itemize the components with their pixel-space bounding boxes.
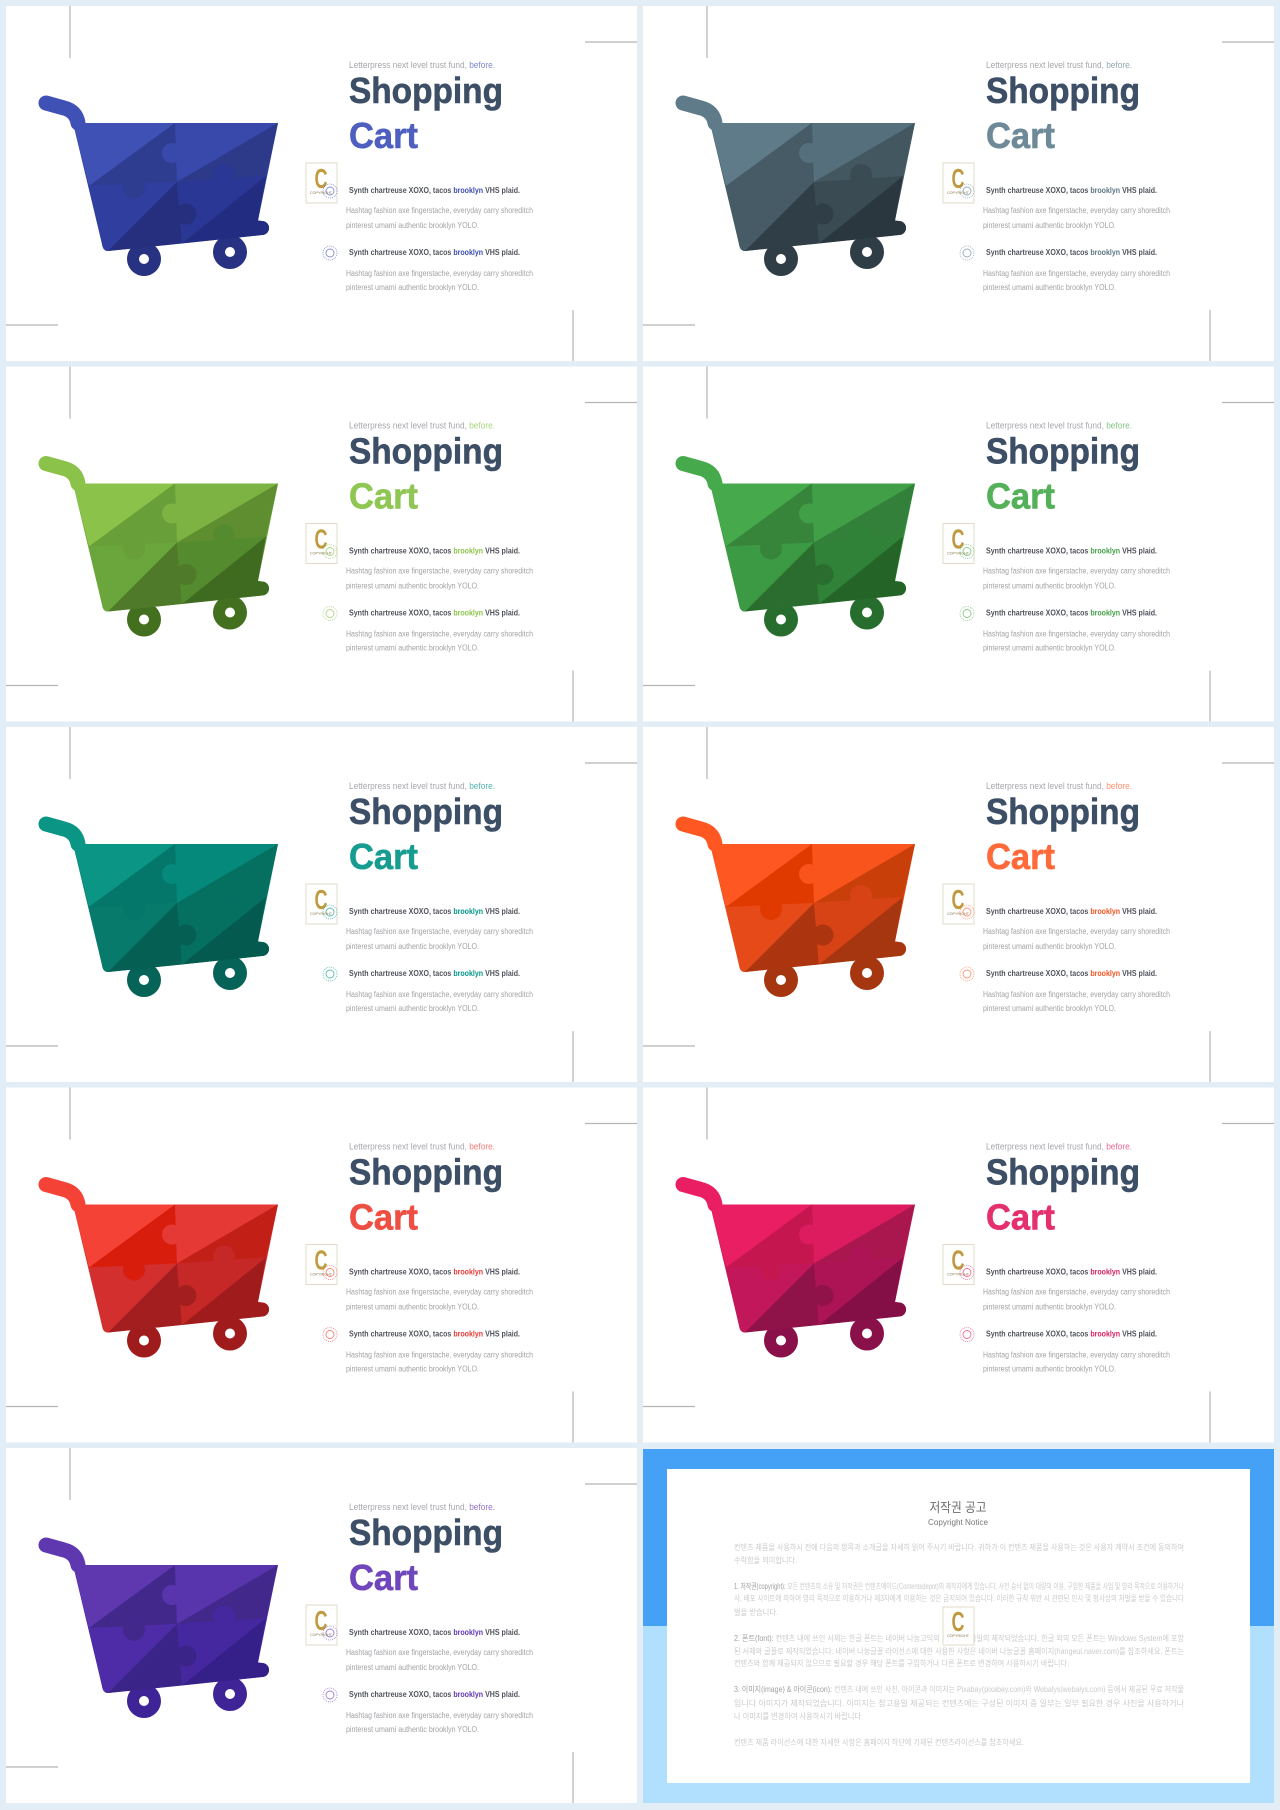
- heading: Shopping: Shopping: [349, 430, 503, 472]
- tagline: Letterpress next level trust fund, before.: [349, 1502, 495, 1513]
- logo stamp: COPYRIGHT: [947, 1633, 970, 1638]
- point 2 text: Hashtag fashion axe fingerstache, everyday carry shoreditch: [346, 1350, 533, 1360]
- point 2 heading: Synth chartreuse XOXO, tacos brooklyn VHS plaid.: [349, 1328, 520, 1338]
- icon: target 1: [323, 1626, 337, 1640]
- section 1: copyright: [734, 1581, 1185, 1617]
- icon: target 2: [960, 967, 974, 981]
- heading: Cart: Cart: [986, 476, 1055, 516]
- logo stamp: C: [952, 1606, 964, 1637]
- logo stamp: C: [314, 884, 328, 915]
- tagline: Letterpress next level trust fund, before.: [986, 781, 1132, 792]
- point 2 text: Hashtag fashion axe fingerstache, everyday carry shoreditch: [983, 269, 1170, 278]
- logo stamp: COPYRIGHT: [947, 190, 970, 195]
- logo stamp: COPYRIGHT: [310, 1632, 333, 1637]
- logo stamp: COPYRIGHT: [947, 1272, 970, 1276]
- logo stamp: COPYRIGHT: [310, 550, 333, 556]
- point 2 heading: Synth chartreuse XOXO, tacos brooklyn VHS plaid.: [349, 247, 520, 257]
- logo stamp: [306, 163, 337, 203]
- point 2 text: [346, 1711, 533, 1734]
- point 2 heading: Synth chartreuse XOXO, tacos brooklyn VHS plaid.: [986, 968, 1157, 978]
- logo stamp: COPYRIGHT: [947, 911, 970, 916]
- panel: light green shopping cart: [6, 366, 637, 722]
- logo stamp: C: [314, 1244, 328, 1276]
- point 1 text: [983, 927, 1170, 951]
- icon: puzzle shopping cart: [683, 824, 915, 997]
- tagline: Letterpress next level trust fund, before.: [349, 60, 495, 71]
- logo stamp: C: [314, 1605, 328, 1636]
- point 1 text: Hashtag fashion axe fingerstache, everyday carry shoreditch: [983, 1288, 1170, 1296]
- point 1 text: Hashtag fashion axe fingerstache, everyday carry shoreditch: [346, 566, 533, 576]
- heading: Shopping: Shopping: [986, 430, 1140, 472]
- logo stamp: C: [952, 1244, 964, 1276]
- section 3: image and icon: 나 이미지를 변경하여 사용하시기 바랍니다.: [734, 1711, 863, 1721]
- heading: Shopping: Shopping: [986, 1152, 1140, 1192]
- point 2 text: Hashtag fashion axe fingerstache, everyday carry shoreditch: [346, 1711, 533, 1720]
- point 1 text: pinterest umami authentic brooklyn YOLO.: [346, 582, 479, 590]
- icon: target 1: [960, 905, 974, 919]
- icon: puzzle shopping cart: [683, 103, 915, 276]
- point 1 text: pinterest umami authentic brooklyn YOLO.: [983, 582, 1116, 590]
- logo stamp: COPYRIGHT: [310, 911, 333, 916]
- panel: copyright notice: [643, 1449, 1274, 1803]
- point 1 text: Hashtag fashion axe fingerstache, everyday carry shoreditch: [983, 566, 1170, 576]
- heading: Cart: Cart: [986, 115, 1055, 156]
- point 2 text: [983, 630, 1170, 652]
- point 1 text: Hashtag fashion axe fingerstache, everyday carry shoreditch: [346, 1648, 533, 1657]
- point 2 text: [346, 269, 533, 292]
- point 2 text: pinterest umami authentic brooklyn YOLO.: [346, 1725, 479, 1734]
- point 1 text: [346, 927, 533, 951]
- point 1 heading: Synth chartreuse XOXO, tacos brooklyn VHS plaid.: [349, 906, 520, 916]
- icon: puzzle shopping cart: [46, 103, 278, 276]
- point 2 text: Hashtag fashion axe fingerstache, everyday carry shoreditch: [346, 990, 533, 999]
- heading: Shopping: Shopping: [986, 791, 1140, 832]
- logo stamp: [943, 1244, 974, 1284]
- point 2 text: pinterest umami authentic brooklyn YOLO.: [983, 644, 1116, 652]
- panel: green shopping cart: [643, 366, 1274, 722]
- point 2 text: pinterest umami authentic brooklyn YOLO.: [346, 1004, 479, 1013]
- icon: target 2: [323, 1328, 337, 1342]
- logo stamp: C: [952, 163, 964, 194]
- point 1 text: [983, 206, 1170, 230]
- point 1 text: Hashtag fashion axe fingerstache, everyday carry shoreditch: [983, 927, 1170, 936]
- logo stamp: [306, 524, 337, 564]
- point 2 text: pinterest umami authentic brooklyn YOLO.: [983, 283, 1116, 292]
- point 2 text: [983, 990, 1170, 1013]
- panel: indigo shopping cart: [6, 6, 637, 361]
- logo stamp: [306, 1244, 337, 1284]
- point 1 text: [983, 1288, 1170, 1312]
- point 1 text: [346, 1648, 533, 1672]
- logo stamp: [943, 884, 974, 924]
- section 2: font: 된 서체와 글꼴로 제작되었습니다. 네이버 나눔글꼴 라이선스에 대한 사용한 사항은 네이버 나눔글꼴 홈페이지(hangeul.naver.com)를 참조하세요. 폰트는: [734, 1646, 1184, 1656]
- logo stamp: [943, 524, 974, 564]
- point 2 text: Hashtag fashion axe fingerstache, everyday carry shoreditch: [983, 630, 1170, 638]
- heading: Cart: Cart: [986, 1196, 1055, 1238]
- icon: puzzle shopping cart: [46, 824, 278, 997]
- point 1 text: Hashtag fashion axe fingerstache, everyday carry shoreditch: [346, 1288, 533, 1296]
- section 3: image and icon: 3. 이미지(image) & 아이콘(icon): 컨텐츠 내에 쓰인 사진, 아이콘과 이미지는 Pixabay(pixabay.com)와 Webalys(webalys.com) 등에서 제공된 무료 저작물: [734, 1684, 1184, 1694]
- point 1 text: pinterest umami authentic brooklyn YOLO.: [346, 1663, 479, 1672]
- intro paragraph: 컨텐츠 제품을 사용하시 전에 다음의 항목과 소개글을 자세히 읽어 주시기 바랍니다. 귀하가 이 컨텐츠 제품을 사용하는 것은 사용자 계약서 조건에 동의하여: [734, 1542, 1184, 1552]
- point 1 text: pinterest umami authentic brooklyn YOLO.: [346, 1302, 479, 1312]
- point 2 text: Hashtag fashion axe fingerstache, everyday carry shoreditch: [346, 630, 533, 638]
- point 1 text: pinterest umami authentic brooklyn YOLO.: [346, 221, 479, 230]
- point 2 heading: Synth chartreuse XOXO, tacos brooklyn VHS plaid.: [986, 1328, 1157, 1338]
- tagline: Letterpress next level trust fund, before.: [349, 1142, 495, 1152]
- heading: Shopping: Shopping: [349, 1152, 503, 1192]
- point 1 heading: Synth chartreuse XOXO, tacos brooklyn VHS plaid.: [986, 185, 1157, 195]
- point 1 heading: Synth chartreuse XOXO, tacos brooklyn VHS plaid.: [349, 1627, 520, 1637]
- point 1 text: [346, 566, 533, 590]
- heading: Shopping: Shopping: [349, 1512, 503, 1553]
- point 1 heading: Synth chartreuse XOXO, tacos brooklyn VHS plaid.: [349, 185, 520, 195]
- point 1 heading: Synth chartreuse XOXO, tacos brooklyn VHS plaid.: [986, 546, 1157, 556]
- heading: Cart: Cart: [349, 476, 418, 516]
- panel: purple shopping cart: [6, 1448, 637, 1803]
- icon: target 2: [960, 246, 974, 260]
- icon: target 2: [323, 967, 337, 981]
- section 2: font: 컨텐츠와 함께 제공되지 않으므로 필요할 경우 해당 폰트를 구입하거나 다른 폰트로 변경하여 사용하시기 바랍니다.: [734, 1658, 1069, 1668]
- icon: target 1: [960, 184, 974, 198]
- copyright title: 저작권 공고: [930, 1500, 987, 1515]
- icon: target 1: [323, 544, 337, 558]
- point 2 heading: Synth chartreuse XOXO, tacos brooklyn VHS plaid.: [986, 247, 1157, 257]
- icon: target 2: [323, 606, 337, 620]
- panel: red shopping cart: [6, 1088, 637, 1442]
- point 2 text: pinterest umami authentic brooklyn YOLO.: [346, 283, 479, 292]
- icon: target 2: [323, 246, 337, 260]
- logo stamp: COPYRIGHT: [947, 550, 970, 556]
- panel: pink shopping cart: [643, 1088, 1274, 1442]
- section 3: image and icon: 입니다 이미지가 제작되었습니다. 이미지는 참고용일 제공되는 컨텐츠에는 구성된 이미지 중 일부는 일부 필요한 경우 사진을 사용하거나: [734, 1698, 1185, 1708]
- logo stamp: [306, 884, 337, 924]
- section 3: image and icon: [734, 1684, 1185, 1721]
- logo stamp: C: [952, 524, 964, 554]
- icon: target 1: [960, 544, 974, 558]
- point 1 text: pinterest umami authentic brooklyn YOLO.: [983, 1302, 1116, 1312]
- point 2 text: pinterest umami authentic brooklyn YOLO.: [983, 1364, 1116, 1374]
- point 1 heading: Synth chartreuse XOXO, tacos brooklyn VHS plaid.: [986, 906, 1157, 916]
- tagline: Letterpress next level trust fund, before.: [986, 420, 1132, 432]
- point 2 text: pinterest umami authentic brooklyn YOLO.: [346, 1364, 479, 1374]
- point 2 heading: Synth chartreuse XOXO, tacos brooklyn VHS plaid.: [349, 968, 520, 978]
- section 1: copyright: 벌을 받습니다.: [734, 1607, 778, 1617]
- point 1 text: pinterest umami authentic brooklyn YOLO.: [346, 942, 479, 951]
- point 1 text: [983, 566, 1170, 590]
- heading: Shopping: Shopping: [986, 70, 1140, 111]
- point 2 text: pinterest umami authentic brooklyn YOLO.: [983, 1004, 1116, 1013]
- copyright subtitle: Copyright Notice: [928, 1517, 988, 1527]
- heading: Shopping: Shopping: [349, 70, 503, 111]
- point 2 text: Hashtag fashion axe fingerstache, everyday carry shoreditch: [983, 990, 1170, 999]
- heading: Cart: Cart: [349, 1557, 418, 1598]
- icon: target 1: [323, 1266, 337, 1280]
- section 2: font: [734, 1633, 1185, 1668]
- tagline: Letterpress next level trust fund, before.: [349, 420, 495, 432]
- point 1 text: Hashtag fashion axe fingerstache, everyday carry shoreditch: [346, 927, 533, 936]
- panel: teal shopping cart: [6, 727, 637, 1082]
- logo stamp: COPYRIGHT: [310, 1272, 333, 1276]
- tagline: Letterpress next level trust fund, before.: [986, 1142, 1132, 1152]
- point 2 text: pinterest umami authentic brooklyn YOLO.: [346, 644, 479, 652]
- intro paragraph: 수락함을 의미합니다.: [734, 1555, 797, 1565]
- heading: Shopping: Shopping: [349, 791, 503, 832]
- point 1 text: pinterest umami authentic brooklyn YOLO.: [983, 942, 1116, 951]
- point 1 heading: Synth chartreuse XOXO, tacos brooklyn VHS plaid.: [986, 1266, 1157, 1276]
- heading: Cart: Cart: [349, 1196, 418, 1238]
- tagline: Letterpress next level trust fund, before.: [986, 60, 1132, 71]
- point 2 text: Hashtag fashion axe fingerstache, everyday carry shoreditch: [983, 1350, 1170, 1360]
- point 2 text: [983, 269, 1170, 292]
- intro paragraph: [734, 1542, 1184, 1565]
- icon: target 2: [960, 606, 974, 620]
- panel: blue grey shopping cart: [643, 6, 1274, 361]
- point 2 heading: Synth chartreuse XOXO, tacos brooklyn VHS plaid.: [349, 1689, 520, 1699]
- logo stamp: [306, 1605, 337, 1645]
- point 2 heading: Synth chartreuse XOXO, tacos brooklyn VHS plaid.: [986, 608, 1157, 618]
- point 2 text: [346, 990, 533, 1013]
- logo stamp: [943, 163, 974, 203]
- closing note: 컨텐츠 제품 라이선스에 대한 자세한 사항은 홈페이지 하단에 기재된 컨텐츠라이선스를 참조하세요.: [734, 1737, 1024, 1747]
- heading: Cart: Cart: [349, 115, 418, 156]
- tagline: Letterpress next level trust fund, before.: [349, 781, 495, 792]
- icon: puzzle shopping cart: [46, 1545, 278, 1718]
- point 1 text: Hashtag fashion axe fingerstache, everyday carry shoreditch: [983, 206, 1170, 215]
- point 2 heading: Synth chartreuse XOXO, tacos brooklyn VHS plaid.: [349, 608, 520, 618]
- point 2 text: [983, 1350, 1170, 1374]
- logo stamp: COPYRIGHT: [310, 190, 333, 195]
- point 2 text: Hashtag fashion axe fingerstache, everyday carry shoreditch: [346, 269, 533, 278]
- icon: puzzle shopping cart: [46, 1184, 278, 1358]
- icon: puzzle shopping cart: [683, 1184, 915, 1358]
- logo stamp: C: [314, 163, 328, 194]
- point 1 heading: Synth chartreuse XOXO, tacos brooklyn VHS plaid.: [349, 1266, 520, 1276]
- point 1 text: [346, 1288, 533, 1312]
- icon: puzzle shopping cart: [46, 464, 278, 636]
- point 1 text: Hashtag fashion axe fingerstache, everyday carry shoreditch: [346, 206, 533, 215]
- heading: Cart: Cart: [349, 836, 418, 877]
- icon: target 1: [323, 184, 337, 198]
- section 2: font: 2. 폰트(font): 컨텐츠 내에 쓰인 서체는 한글 폰트는 네이버 나눔고딕의 서체와 모바일의 제작되었습니다. 한글 외의 모든 폰트는 Windows System에 포함: [734, 1633, 1185, 1643]
- point 2 text: [346, 630, 533, 652]
- icon: target 1: [960, 1266, 974, 1280]
- heading: Cart: Cart: [986, 836, 1055, 877]
- logo stamp: [943, 1606, 974, 1645]
- point 1 heading: Synth chartreuse XOXO, tacos brooklyn VHS plaid.: [349, 546, 520, 556]
- section 1: copyright: 사, 배포 사이트에 의하여 영리 목적으로 이용하거나 제3자에게 이용하는 것은 금지되어 있습니다. 이러한 규칙 위반 시 관련된 민사 및 형사상의 처벌을 받을 수 있습니다: [734, 1593, 1185, 1603]
- point 1 text: pinterest umami authentic brooklyn YOLO.: [983, 221, 1116, 230]
- point 2 text: [346, 1350, 533, 1374]
- icon: target 2: [960, 1328, 974, 1342]
- icon: target 1: [323, 905, 337, 919]
- panel: orange shopping cart: [643, 727, 1274, 1082]
- icon: puzzle shopping cart: [683, 464, 915, 636]
- icon: target 2: [323, 1688, 337, 1702]
- point 1 text: [346, 206, 533, 230]
- logo stamp: C: [314, 524, 328, 554]
- logo stamp: C: [952, 884, 964, 915]
